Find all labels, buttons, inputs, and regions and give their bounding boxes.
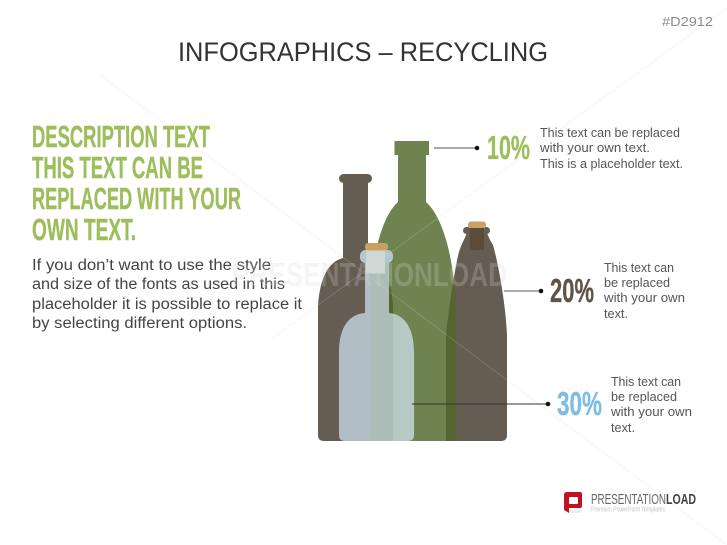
callout: 10 percent	[434, 125, 683, 171]
title: INFOGRAPHICS – RECYCLING	[178, 37, 548, 67]
logo: PRESENTATION	[591, 491, 666, 508]
body text block	[32, 257, 303, 332]
callout: 20 percent: This text can	[604, 260, 674, 275]
callout: 10 percent: 10%	[487, 129, 530, 166]
body text block: and size of the fonts as used in this	[32, 276, 285, 293]
callout: 30 percent: be replaced	[611, 389, 677, 404]
heading: description text: THIS TEXT CAN BE	[32, 150, 203, 185]
callout: 30 percent	[412, 374, 692, 435]
light glass bottle	[339, 243, 415, 445]
callout: 30 percent: with your own	[610, 404, 692, 419]
green bottle	[370, 141, 456, 441]
callout: 20 percent: 20%	[550, 272, 594, 309]
callout: 20 percent	[504, 260, 685, 321]
heading: description text: OWN TEXT.	[32, 212, 136, 247]
bottle illustration	[318, 141, 507, 445]
overlap shade	[389, 278, 456, 441]
slide code: #D2912	[662, 14, 713, 29]
callout: 30 percent: 30%	[557, 385, 602, 422]
callout: 30 percent: This text can	[611, 374, 681, 389]
heading: description text: REPLACED WITH YOUR	[32, 181, 241, 216]
callout: 20 percent: text.	[604, 306, 628, 321]
callout: 20 percent: be replaced	[604, 275, 670, 290]
callout: 10 percent: This text can be replaced	[540, 125, 680, 140]
left brown bottle	[318, 174, 393, 441]
callout: 20 percent: with your own	[603, 290, 685, 305]
logo: LOAD	[666, 491, 696, 508]
right brown bottle	[446, 222, 507, 441]
heading: description text: DESCRIPTION TEXT	[32, 119, 210, 154]
body text block: If you don’t want to use the style	[32, 257, 271, 274]
heading: description text	[32, 119, 241, 247]
callout: 30 percent: text.	[611, 420, 635, 435]
watermark: PRESENTATIONLOAD	[232, 256, 507, 293]
logo: Premium PowerPoint Templates	[591, 504, 665, 514]
callout: 10 percent: with your own text.	[539, 140, 650, 155]
body text block: placeholder it is possible to replace it	[32, 296, 303, 313]
logo	[564, 491, 696, 514]
callout: 10 percent: This is a placeholder text.	[540, 156, 683, 171]
body text block: by selecting different options.	[32, 315, 247, 332]
